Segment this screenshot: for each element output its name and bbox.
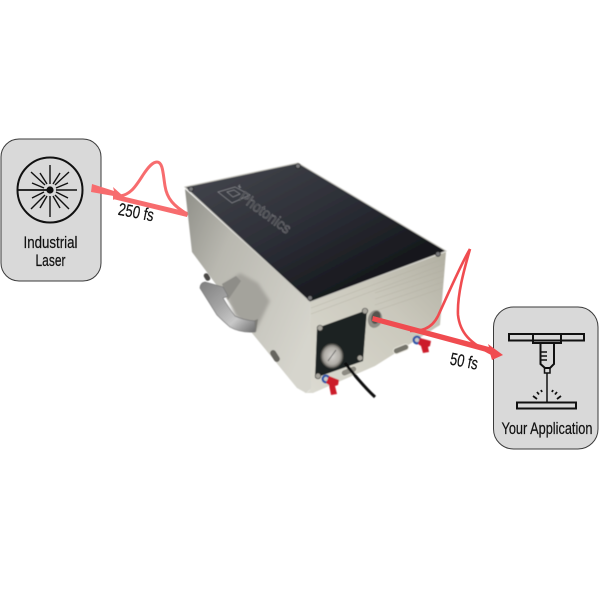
output port bbox=[366, 308, 384, 330]
output pulse and beam bbox=[372, 249, 503, 360]
side slots bbox=[269, 349, 281, 363]
icon: laser processing head bbox=[509, 334, 584, 408]
left side face bbox=[185, 189, 312, 393]
input pulse and beam bbox=[91, 162, 188, 217]
pressure gauge bbox=[321, 344, 343, 368]
fitting: left bbox=[322, 374, 339, 395]
logo and brand name: Photonics bbox=[236, 188, 294, 238]
logo and brand name bbox=[218, 184, 294, 238]
top screws bbox=[189, 164, 440, 300]
label: 250 fs: 250 fs bbox=[117, 199, 156, 225]
label: 50 fs: 50 fs bbox=[448, 349, 480, 374]
device: laser compressor box bbox=[185, 163, 446, 397]
cable bbox=[345, 363, 375, 397]
front face bbox=[304, 252, 446, 393]
icon: laser aperture bbox=[18, 158, 82, 222]
fitting: right bbox=[412, 336, 431, 353]
label: industrial: Industrial bbox=[24, 234, 78, 252]
panel: your application bbox=[494, 307, 598, 449]
front control plate bbox=[315, 308, 368, 379]
slots in front face bbox=[392, 343, 410, 355]
label: laser: Laser bbox=[36, 252, 66, 270]
black top plate bbox=[185, 163, 446, 302]
panel: industrial laser bbox=[1, 139, 101, 281]
handle bbox=[200, 273, 270, 332]
